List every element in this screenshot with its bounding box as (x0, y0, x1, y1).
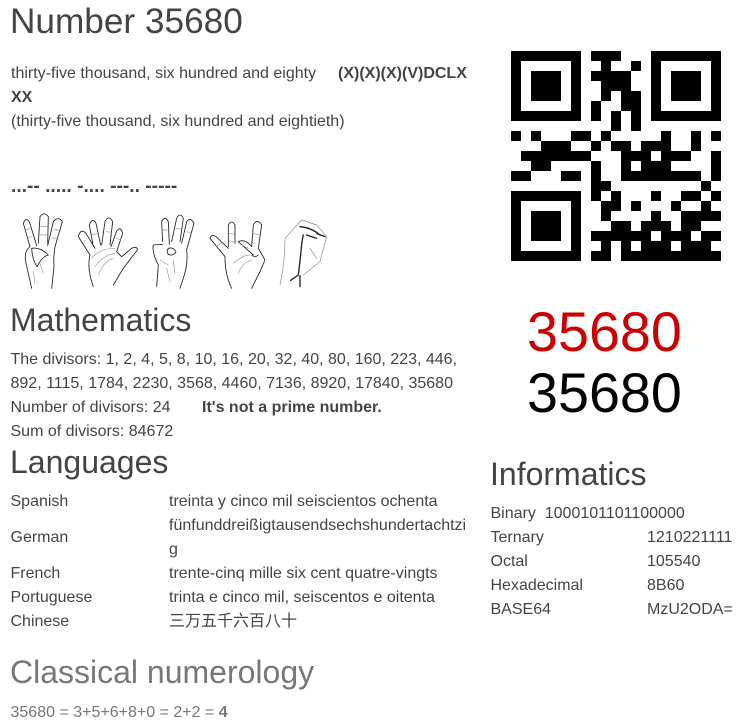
ordinal name: (thirty-five thousand, six hundred and eightieth) (11, 113, 345, 130)
roman numeral: (X)(X)(X)(V)DCLX (338, 65, 467, 82)
icon: hand sign 6 (153, 215, 194, 288)
binary row: Binary 1000101101100000 (490, 505, 685, 522)
heading: languages: Languages (10, 444, 168, 480)
heading: mathematics: Mathematics (10, 302, 191, 338)
language labels (10, 493, 92, 630)
language values: trente-cinq mille six cent quatre-vingts (169, 565, 438, 582)
base64 row (490, 601, 733, 618)
sign language hands (22, 213, 327, 289)
language labels: German (10, 529, 68, 546)
heading: informatics: Informatics (490, 456, 646, 492)
divisors line two: 892, 1115, 1784, 2230, 3568, 4460, 7136, 8920, 17840, 35680 (10, 375, 453, 392)
octal row: 105540 (647, 553, 700, 570)
divisors text (10, 351, 457, 440)
QR code (511, 51, 721, 261)
prime note: It's not a prime number. (202, 399, 382, 416)
hexadecimal row: 8B60 (647, 577, 684, 594)
number name and roman numeral (11, 65, 467, 130)
hexadecimal row: Hexadecimal (490, 577, 583, 594)
language values: g (169, 541, 178, 558)
ternary row: Ternary (490, 529, 544, 546)
language values: treinta y cinco mil seiscientos ochenta (169, 493, 438, 510)
language values: 三万五千六百八十 (169, 613, 297, 630)
cardinal name: thirty-five thousand, six hundred and eighty (11, 65, 316, 82)
icon: hand sign 3 (23, 214, 62, 288)
base64 row: BASE64 (490, 601, 551, 618)
roman numeral continuation: XX (11, 89, 32, 106)
numerology sum: 35680 = 3+5+6+8+0 = 2+2 = 4 (10, 704, 228, 721)
base64 row: MzU2ODA= (647, 601, 733, 618)
ternary row (490, 529, 732, 546)
hexadecimal row (490, 577, 684, 594)
languages table (10, 493, 466, 630)
language labels: Spanish (10, 493, 68, 510)
octal row (490, 553, 700, 570)
language labels: Portuguese (10, 589, 92, 606)
icon: hand sign 8 (210, 221, 265, 288)
black number: 35680 (527, 362, 682, 424)
divisors line one: The divisors: 1, 2, 4, 5, 8, 10, 16, 20, 32, 40, 80, 160, 223, 446, (10, 351, 457, 368)
language values: trinta e cinco mil, seiscentos e oitenta (169, 589, 435, 606)
language values: fünfunddreißigtausendsechshundertachtzi (169, 517, 466, 534)
heading: classical numerology: Classical numerology (10, 654, 314, 690)
title: Number 35680 (10, 2, 243, 41)
language labels: Chinese (10, 613, 69, 630)
morse code: ...-- ..... -.... ---.. ----- (11, 176, 177, 197)
red number: 35680 (527, 301, 682, 363)
octal row: Octal (490, 553, 528, 570)
icon: hand sign 5 (78, 218, 137, 287)
number of divisors: Number of divisors: 24 (10, 399, 171, 416)
icon: hand sign 0 (280, 220, 327, 287)
language labels: French (10, 565, 60, 582)
language values (169, 493, 466, 630)
informatics table (490, 505, 733, 618)
sum of divisors: Sum of divisors: 84672 (10, 423, 173, 440)
ternary row: 1210221111 (647, 529, 732, 546)
